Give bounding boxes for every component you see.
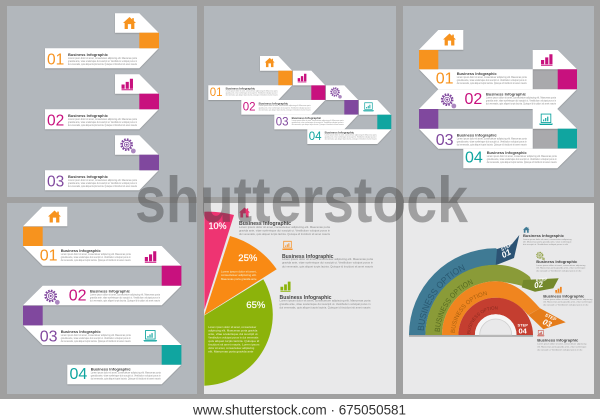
- step 01: dui venenatis, quis aliquet turpis lacinia. Quisque id tincidunt sit amet mauris: [68, 62, 137, 66]
- step 02: dui venenatis, quis aliquet turpis lacinia. Quisque id tincidunt sit amet mauris: [68, 123, 137, 127]
- text block: step 01: dui suscipit ut. Vestibulum volutpat purus in dui: [523, 243, 569, 246]
- step 02 text: gravida ante, vitae scelerisque dui suscipit ut. Vestibulum volutpat purus in: [90, 295, 160, 299]
- icon: laptop: [539, 114, 553, 125]
- text block: step 03: Lorem ipsum dolor sit amet, consectetuer adipiscing: [543, 298, 592, 301]
- step 02: [45, 74, 159, 130]
- text block: step 04: [537, 338, 586, 351]
- icon: house: [239, 207, 250, 218]
- step 03 text: Lorem ipsum dolor sit amet, consectetuer adipiscing elit. Maecenas porta: [61, 333, 131, 337]
- step 02 text: 02: [69, 288, 87, 305]
- text block: step 03: Business Infographic: [543, 294, 585, 298]
- pie slice: 10%: [204, 212, 234, 310]
- pie slice: 25%: Lorem ipsum dolor sit amet,: [221, 270, 257, 274]
- arc band: step 03: 03: [541, 317, 553, 329]
- step 03 text: 03: [40, 329, 58, 346]
- pie slice: 25%: Maecenas porta gravida ante: [221, 277, 257, 281]
- step 03 text: [436, 132, 527, 149]
- step 02: 02: [47, 113, 64, 130]
- panel: pie chart: [204, 203, 396, 394]
- arc band: step 01: [409, 235, 520, 335]
- pie slice: 25%: 25%: [238, 253, 258, 264]
- text block: 65%: [280, 295, 371, 310]
- step 04 text: dui venenatis, quis aliquet turpis lacinia. Quisque id tincidunt sit amet mauris: [487, 160, 557, 164]
- arc band: step 02: [425, 264, 559, 335]
- step 04 text: Lorem ipsum dolor sit amet, consectetuer adipiscing elit. Maecenas porta: [91, 371, 161, 375]
- icon: house: [48, 211, 61, 222]
- text block: 65%: dui venenatis, quis aliquet turpis lacinia. Quisque id tincidunt sit amet mauris: [280, 306, 371, 310]
- step 01: gravida ante, vitae scelerisque dui suscipit ut. Vestibulum volutpat purus in: [226, 92, 278, 95]
- text block: step 01: Business Infographic: [523, 233, 565, 238]
- step 02 text: Business Infographic: [486, 92, 527, 96]
- step 03: [274, 85, 358, 129]
- text block: step 03: elit. Maecenas porta gravida ante, vitae scelerisque: [543, 301, 592, 304]
- step 03: Lorem ipsum dolor sit amet, consectetuer adipiscing elit. Maecenas porta: [292, 119, 344, 122]
- pie slice: 65%: ante, vitae scelerisque dui suscipit ut.: [208, 332, 259, 336]
- pie slice: 65%: 65%: [246, 300, 266, 311]
- step 02: Lorem ipsum dolor sit amet, consectetuer adipiscing elit. Maecenas porta: [68, 117, 137, 121]
- step 01 text: Business Infographic: [61, 248, 101, 253]
- step 01 text: 01: [40, 248, 58, 265]
- panel: zigzag three steps: [7, 6, 197, 197]
- icon: house: [443, 34, 456, 45]
- icon: gear: [537, 252, 545, 260]
- step 01: Lorem ipsum dolor sit amet, consectetuer adipiscing elit. Maecenas porta: [226, 90, 278, 92]
- white hub: [475, 314, 516, 335]
- step 01: Business Infographic: [226, 87, 256, 91]
- text block: 10%: dui venenatis, quis aliquet turpis lacinia. Quisque id tincidunt sit amet mauris: [239, 232, 330, 236]
- step 04: gravida ante, vitae scelerisque dui suscipit ut. Vestibulum volutpat purus in: [325, 136, 377, 139]
- pie slice: 65%: Vestibulum volutpat purus in dui venenatis: [208, 336, 259, 340]
- icon: bars: [541, 54, 552, 66]
- icon: bars: [145, 251, 156, 263]
- arc band: step 03: BUSINESS OPTION: [450, 291, 487, 333]
- step 03 text: Business Infographic: [457, 132, 497, 138]
- panel: ribbon four steps with boxes: [403, 6, 594, 197]
- step 04: 04: [309, 131, 322, 143]
- step 03: gravida ante, vitae scelerisque dui suscipit ut. Vestibulum volutpat purus in: [68, 181, 137, 185]
- step 03: 03: [47, 174, 64, 191]
- step 01 text: Lorem ipsum dolor sit amet, consectetuer adipiscing elit. Maecenas porta: [61, 252, 131, 256]
- step 02 text: [69, 288, 160, 305]
- arc band: step 03: STEP: [544, 312, 558, 322]
- footer credit: www.shutterstock.com · 675050581: [192, 402, 406, 418]
- icon: laptop: [143, 330, 157, 342]
- step 02 text: 02: [464, 91, 482, 108]
- arc band: step 03: [442, 281, 566, 335]
- step 01 text: dui venenatis, quis aliquet turpis lacinia. Quisque id tincidunt sit amet mauris: [61, 258, 131, 262]
- arc band: step 02: BUSINESS OPTION: [434, 279, 473, 332]
- text block: step 04: Business Infographic: [537, 338, 579, 343]
- text block: 65%: Lorem ipsum dolor sit amet, consectetuer adipiscing elit. Maecenas porta: [280, 298, 371, 302]
- text block: 25%: Business Infographic: [282, 254, 334, 260]
- step 03: Business Infographic: [68, 174, 109, 179]
- step 01: 01: [47, 52, 64, 69]
- pie slice: 65%: adipiscing elit. Maecenas porta gravida: [208, 328, 258, 332]
- text block: step 01: elit. Maecenas porta gravida ante, vitae scelerisque: [523, 240, 572, 244]
- step 02: 02: [243, 102, 255, 114]
- pie slice: 65%: [204, 279, 273, 386]
- icon: bars: [280, 282, 291, 292]
- step 03: dui venenatis, quis aliquet turpis lacinia. Quisque id tincidunt sit amet mauris: [68, 184, 137, 188]
- text block: step 02: Business Infographic: [536, 259, 578, 264]
- text block: step 02: [536, 259, 585, 272]
- panel: serpentine four steps: [7, 203, 197, 394]
- panel: semicircle steps: [403, 203, 594, 394]
- step 04: [307, 100, 391, 144]
- pie slice: 65%: quis aliquet turpis lacinia. Quisque id: [208, 339, 260, 343]
- step 03 text: 03: [436, 132, 454, 149]
- arc band: step 01: 01: [500, 247, 513, 260]
- text block: 65%: Business Infographic: [280, 295, 332, 301]
- step 01: 01: [210, 87, 222, 99]
- step 02: Lorem ipsum dolor sit amet, consectetuer adipiscing elit. Maecenas porta: [259, 104, 311, 107]
- step 03 text: gravida ante, vitae scelerisque dui suscipit ut. Vestibulum volutpat purus in: [457, 140, 527, 144]
- text block: step 03: dui suscipit ut. Vestibulum volutpat purus in dui: [543, 304, 589, 307]
- step 01 text: gravida ante, vitae scelerisque dui suscipit ut. Vestibulum volutpat purus in: [61, 255, 131, 259]
- step 02: gravida ante, vitae scelerisque dui suscipit ut. Vestibulum volutpat purus in: [259, 106, 311, 109]
- step 04 text: Business Infographic: [487, 150, 527, 155]
- step 02: Business Infographic: [68, 113, 109, 118]
- step 02: gravida ante, vitae scelerisque dui suscipit ut. Vestibulum volutpat purus in: [68, 120, 137, 124]
- arc band: step 04: [458, 298, 533, 336]
- step 03 text: Business Infographic: [61, 329, 101, 334]
- step 01: gravida ante, vitae scelerisque dui suscipit ut. Vestibulum volutpat purus in: [68, 59, 137, 63]
- step 01 text: 01: [436, 70, 454, 87]
- step 02 text: dui venenatis, quis aliquet turpis lacinia. Quisque id tincidunt sit amet mauris: [90, 298, 160, 302]
- text block: step 02: dui suscipit ut. Vestibulum volutpat purus in dui: [536, 270, 582, 272]
- pie slice: 65%: Lorem ipsum dolor sit amet, consectetuer: [208, 325, 256, 329]
- text block: step 02: Lorem ipsum dolor sit amet, consectetuer adipiscing: [536, 264, 585, 267]
- step 04 text: gravida ante, vitae scelerisque dui suscipit ut. Vestibulum volutpat purus in: [91, 374, 161, 378]
- arc band: step 04: STEP: [517, 322, 528, 328]
- step 02 text: dui venenatis, quis aliquet turpis lacinia. Quisque id tincidunt sit amet mauris: [486, 102, 556, 106]
- pie slice: 65%: dolor sit amet, consectetuer adipiscing: [208, 346, 255, 350]
- panel: staircase four steps: [204, 6, 396, 197]
- step 04 text: Business Infographic: [91, 367, 131, 372]
- step 02 text: Lorem ipsum dolor sit amet, consectetuer adipiscing elit. Maecenas porta: [90, 292, 160, 296]
- pie slice: 65%: elit. Maecenas porta gravida ante: [208, 350, 254, 354]
- step 03 text: Lorem ipsum dolor sit amet, consectetuer adipiscing elit. Maecenas porta: [457, 136, 527, 140]
- text block: 25%: Lorem ipsum dolor sit amet, consectetuer adipiscing elit. Maecenas porta: [282, 257, 373, 261]
- text block: step 03: [543, 294, 592, 307]
- text block: 10%: Business Infographic: [239, 221, 291, 227]
- step 03: gravida ante, vitae scelerisque dui suscipit ut. Vestibulum volutpat purus in: [292, 121, 344, 124]
- step 01: Business Infographic: [68, 52, 109, 57]
- step 04: Lorem ipsum dolor sit amet, consectetuer adipiscing elit. Maecenas porta: [325, 134, 377, 136]
- arc band: step 01: STEP: [500, 242, 514, 252]
- colour squares: [23, 227, 181, 365]
- icon: gear: [45, 291, 60, 305]
- step 03 text: gravida ante, vitae scelerisque dui suscipit ut. Vestibulum volutpat purus in: [61, 336, 131, 340]
- arc band: step 02: STEP: [535, 276, 549, 284]
- step 01: [208, 56, 292, 100]
- step 02 text: gravida ante, vitae scelerisque dui suscipit ut. Vestibulum volutpat purus in: [486, 98, 556, 102]
- text block: step 02: elit. Maecenas porta gravida ante, vitae scelerisque: [536, 266, 585, 270]
- step 01: dui venenatis, quis aliquet turpis lacinia. Quisque id tincidunt sit amet mauris: [226, 94, 278, 97]
- text block: step 04: dui suscipit ut. Vestibulum volutpat purus in dui: [537, 348, 583, 351]
- arc band: step 01: BUSINESS OPTION: [418, 264, 465, 330]
- pie slice: 65%: tincidunt sit amet mauris. Lorem ipsum: [208, 342, 260, 346]
- step 03 text: dui venenatis, quis aliquet turpis lacinia. Quisque id tincidunt sit amet mauris: [457, 142, 527, 146]
- icon: house: [523, 227, 530, 233]
- text block: 65%: gravida ante, vitae scelerisque dui suscipit ut. Vestibulum volutpat purus in: [280, 302, 371, 306]
- text block: 25%: [282, 254, 373, 268]
- icon: laptop: [282, 241, 293, 250]
- serpentine shapes: [23, 207, 181, 384]
- step 04 text: Lorem ipsum dolor sit amet, consectetuer adipiscing elit. Maecenas porta: [487, 154, 557, 158]
- icon: gear: [442, 94, 456, 108]
- step 02: Business Infographic: [259, 101, 289, 105]
- step 03: dui venenatis, quis aliquet turpis lacinia. Quisque id tincidunt sit amet mauris: [292, 123, 344, 126]
- pie slice: 25%: consectetuer adipiscing elit.: [221, 273, 257, 277]
- step 04: dui venenatis, quis aliquet turpis lacinia. Quisque id tincidunt sit amet mauris: [325, 138, 377, 141]
- text block: step 04: Lorem ipsum dolor sit amet, consectetuer adipiscing: [537, 342, 586, 345]
- icon: laptop: [537, 330, 544, 336]
- step 01 text: [436, 70, 527, 87]
- step 02: dui venenatis, quis aliquet turpis lacinia. Quisque id tincidunt sit amet mauris: [259, 108, 311, 111]
- step 03 text: dui venenatis, quis aliquet turpis lacinia. Quisque id tincidunt sit amet mauris: [61, 339, 131, 343]
- step 01 text: gravida ante, vitae scelerisque dui suscipit ut. Vestibulum volutpat purus in: [457, 78, 527, 82]
- step 04 text: [70, 366, 161, 383]
- step 03: Lorem ipsum dolor sit amet, consectetuer adipiscing elit. Maecenas porta: [68, 178, 137, 182]
- step 02 text: Lorem ipsum dolor sit amet, consectetuer adipiscing elit. Maecenas porta: [486, 96, 556, 100]
- step 01 text: [40, 248, 131, 265]
- step 04 text: dui venenatis, quis aliquet turpis lacinia. Quisque id tincidunt sit amet mauris: [91, 377, 161, 381]
- step 04: Business Infographic: [325, 131, 355, 135]
- step 02 text: Business Infographic: [90, 288, 131, 293]
- pie slice: 10%: 10%: [208, 221, 227, 231]
- ribbon shapes: [419, 30, 577, 168]
- arc band: step 02: 02: [533, 280, 544, 290]
- step 03 text: [40, 329, 131, 346]
- arc band: step 04: BUSINESS OPTION: [467, 306, 498, 334]
- watermark: shutterstock: [135, 163, 469, 236]
- step 04 text: gravida ante, vitae scelerisque dui suscipit ut. Vestibulum volutpat purus in: [487, 157, 557, 161]
- arc band: step 04: 04: [519, 326, 528, 336]
- step 01 text: dui venenatis, quis aliquet turpis lacinia. Quisque id tincidunt sit amet mauris: [457, 81, 527, 85]
- step 04 text: 04: [70, 366, 87, 383]
- step 01 text: Lorem ipsum dolor sit amet, consectetuer adipiscing elit. Maecenas porta: [457, 75, 527, 79]
- step 03: [45, 135, 159, 191]
- pie slice: 25%: [204, 236, 277, 315]
- text block: step 01: Lorem ipsum dolor sit amet, consectetuer adipiscing: [523, 238, 572, 241]
- text block: 25%: gravida ante, vitae scelerisque dui suscipit ut. Vestibulum volutpat purus in: [282, 261, 373, 265]
- step 01: Lorem ipsum dolor sit amet, consectetuer adipiscing elit. Maecenas porta: [68, 56, 137, 60]
- step 04 text: 04: [465, 150, 483, 166]
- icon: bars: [555, 287, 562, 293]
- text block: 10%: gravida ante, vitae scelerisque dui suscipit ut. Vestibulum volutpat purus in: [239, 228, 330, 232]
- step 04 text: [465, 150, 557, 166]
- text block: step 04: elit. Maecenas porta gravida ante, vitae scelerisque: [537, 345, 586, 348]
- step 03: Business Infographic: [292, 116, 322, 120]
- text block: 25%: dui venenatis, quis aliquet turpis lacinia. Quisque id tincidunt sit amet mauris: [282, 264, 373, 268]
- text block: 10%: Lorem ipsum dolor sit amet, consectetuer adipiscing elit. Maecenas porta: [239, 225, 330, 229]
- step 03: 03: [276, 116, 288, 128]
- step 01: [45, 13, 159, 69]
- step 02 text: [464, 91, 556, 108]
- text block: 10%: [239, 221, 330, 236]
- step 01 text: Business Infographic: [457, 71, 497, 76]
- colour squares: [419, 50, 577, 148]
- step 02: [241, 71, 325, 115]
- text block: step 01: [523, 233, 572, 246]
